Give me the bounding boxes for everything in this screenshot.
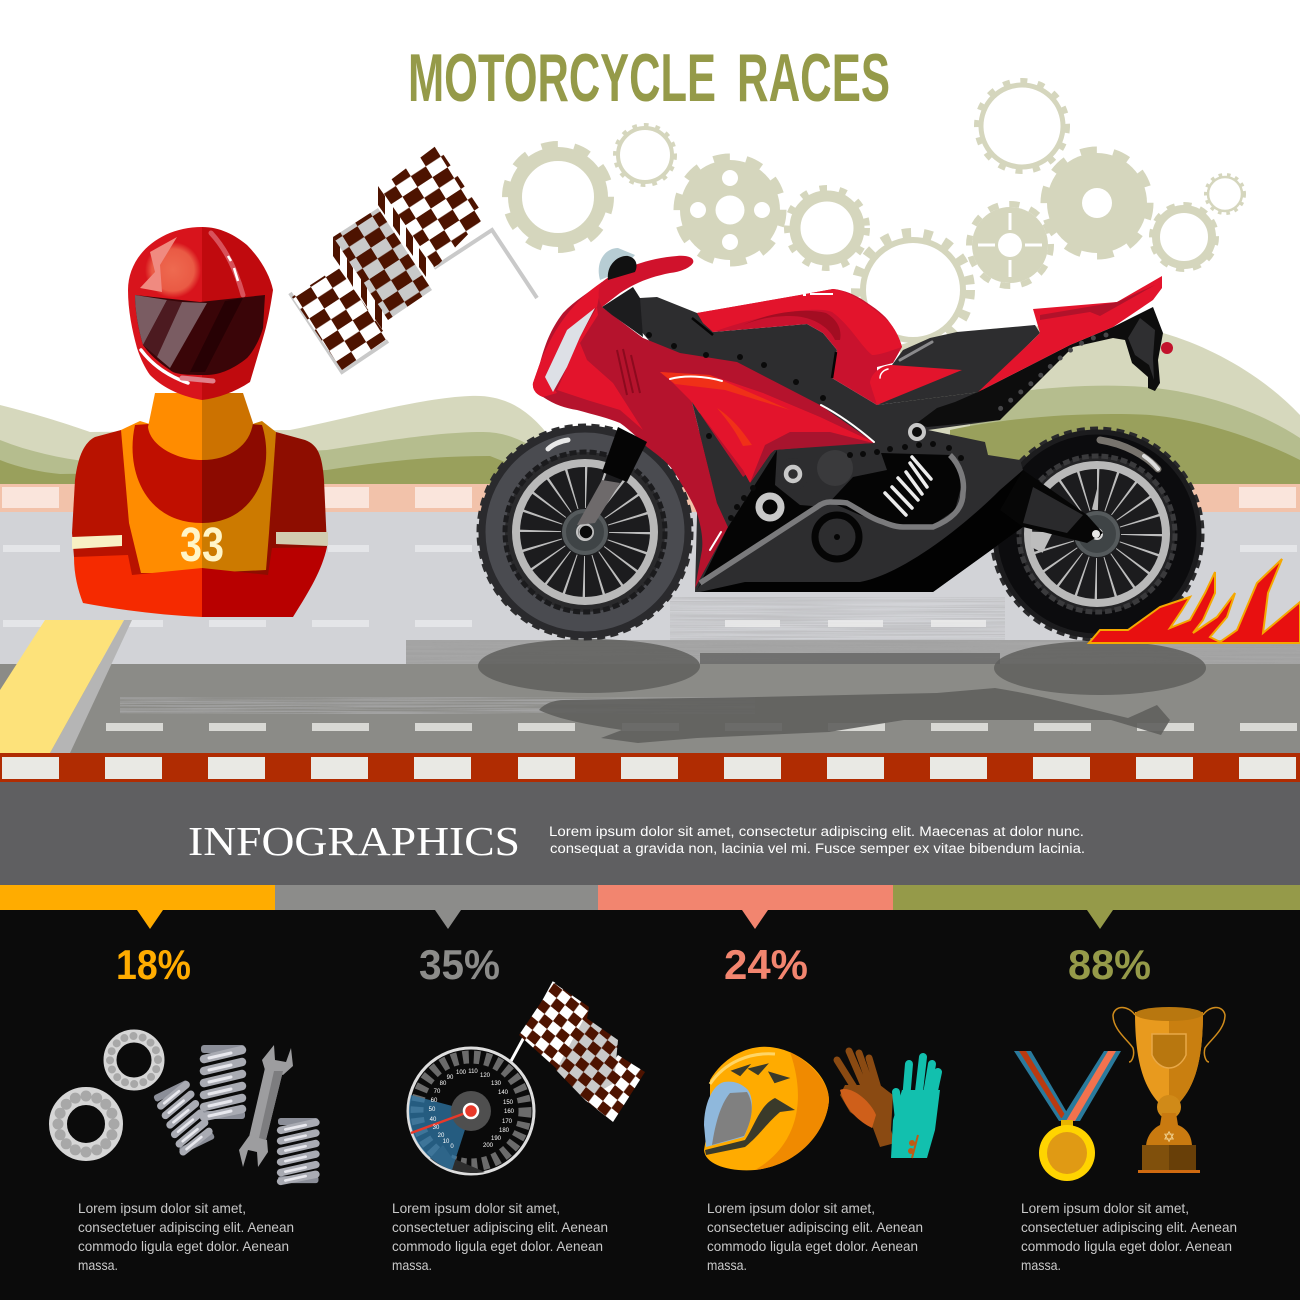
dial numbers: 0 xyxy=(450,1144,454,1150)
helmet shine xyxy=(145,242,201,298)
torso xyxy=(72,418,202,617)
title: MOTORCYCLE xyxy=(408,40,716,116)
body text: commodo ligula eget dolor. Aenean xyxy=(78,1238,289,1254)
background hills xyxy=(0,326,1300,484)
exhaust pipe xyxy=(700,455,963,583)
frame dark xyxy=(640,297,1023,592)
gear J xyxy=(977,81,1067,171)
lower fairing dark wedge xyxy=(692,402,753,527)
panel highlights xyxy=(660,372,790,410)
dial numbers: 20 xyxy=(438,1133,445,1139)
tail fairing xyxy=(978,276,1162,392)
helmet xyxy=(128,227,202,400)
rivets xyxy=(646,332,964,521)
flames xyxy=(1089,559,1300,643)
dark road surface xyxy=(0,664,1300,753)
body text xyxy=(392,1200,608,1273)
gear D xyxy=(787,188,867,268)
peach kerb strip xyxy=(0,484,1300,512)
icon: small flag xyxy=(504,982,645,1122)
gear G xyxy=(1044,150,1150,256)
vest xyxy=(121,421,202,573)
black panel xyxy=(0,910,1300,1300)
panel shade xyxy=(750,432,873,483)
headlight xyxy=(545,308,595,392)
belly black band xyxy=(700,470,1030,592)
column 2 xyxy=(275,885,645,1273)
neck xyxy=(148,393,202,460)
gear E xyxy=(856,233,970,347)
flag pole xyxy=(434,230,537,298)
screen inner dark xyxy=(602,287,643,337)
bike shadow on road xyxy=(478,639,1206,743)
colour bar xyxy=(275,885,598,929)
percent: 24% xyxy=(724,941,808,988)
body text: massa. xyxy=(392,1257,432,1273)
body text xyxy=(1021,1200,1237,1273)
body text: commodo ligula eget dolor. Aenean xyxy=(707,1238,918,1254)
front tyre highlight xyxy=(548,440,568,449)
dial numbers: 200 xyxy=(483,1143,494,1149)
tank xyxy=(697,289,902,405)
icon: trophy xyxy=(1113,1007,1225,1173)
fairing base xyxy=(533,282,875,588)
dial numbers: 60 xyxy=(431,1098,438,1104)
light road surface xyxy=(0,512,1300,664)
racer figure xyxy=(72,227,328,617)
dial numbers: 90 xyxy=(447,1075,454,1081)
visor xyxy=(135,295,265,375)
percent: 18% xyxy=(116,941,191,988)
body text xyxy=(78,1200,294,1273)
body text: Lorem ipsum dolor sit amet, xyxy=(1021,1200,1189,1216)
body text: consectetuer adipiscing elit. Aenean xyxy=(392,1219,608,1235)
icon: gloves xyxy=(837,1051,940,1158)
body text: Lorem ipsum dolor sit amet, xyxy=(707,1200,875,1216)
body text: consectetuer adipiscing elit. Aenean xyxy=(707,1219,923,1235)
skid streaks xyxy=(120,597,1300,714)
yellow track line xyxy=(50,620,132,753)
dial numbers: 110 xyxy=(468,1069,478,1075)
rear wheel xyxy=(993,430,1201,638)
gear A xyxy=(506,145,610,249)
engine black xyxy=(697,450,963,590)
dial numbers: 30 xyxy=(433,1125,440,1131)
dial numbers: 140 xyxy=(498,1090,509,1096)
colour bar xyxy=(893,885,1300,929)
icon: speedometer xyxy=(408,1048,534,1174)
dial numbers: 180 xyxy=(499,1128,510,1134)
bearings on bike xyxy=(759,425,924,518)
gear H xyxy=(1151,204,1217,270)
colour bar xyxy=(0,885,275,929)
dial numbers: 150 xyxy=(503,1100,514,1106)
dial numbers: 40 xyxy=(430,1117,437,1123)
arm bands xyxy=(72,535,122,549)
dial numbers xyxy=(429,1069,515,1150)
dial numbers: 100 xyxy=(456,1070,467,1076)
nose / screen arm xyxy=(599,256,693,307)
gear F xyxy=(969,204,1051,286)
icon: bearings xyxy=(58,1036,158,1152)
motorcycle xyxy=(480,248,1300,643)
body text: consectetuer adipiscing elit. Aenean xyxy=(78,1219,294,1235)
body text: commodo ligula eget dolor. Aenean xyxy=(392,1238,603,1254)
info band xyxy=(0,782,1300,885)
dial numbers: 120 xyxy=(480,1073,491,1079)
tail dots xyxy=(995,335,1106,413)
intro text: Lorem ipsum dolor sit amet, consectetur adipiscing elit. Maecenas at dolor nunc. xyxy=(549,824,1084,839)
body text: Lorem ipsum dolor sit amet, xyxy=(392,1200,560,1216)
dial numbers: 50 xyxy=(429,1107,436,1113)
tail subframe xyxy=(917,307,1163,427)
front fork xyxy=(577,427,647,539)
mirror xyxy=(599,248,637,280)
icon: yellow helmet xyxy=(704,1047,829,1170)
dial numbers: 170 xyxy=(502,1119,513,1125)
swingarm xyxy=(1000,470,1103,543)
folded arms xyxy=(74,555,202,617)
finish stripe xyxy=(0,753,1300,782)
percent: 88% xyxy=(1068,941,1151,988)
body text: commodo ligula eget dolor. Aenean xyxy=(1021,1238,1232,1254)
column 3 xyxy=(598,885,940,1273)
engine dark bar xyxy=(775,450,887,507)
race number: 33 xyxy=(180,519,224,572)
body text: massa. xyxy=(707,1257,747,1273)
body text: consectetuer adipiscing elit. Aenean xyxy=(1021,1219,1237,1235)
suspension spring xyxy=(885,457,931,515)
title: RACES xyxy=(737,40,890,116)
fairing bright xyxy=(557,307,643,430)
icon: springs xyxy=(153,1045,318,1183)
gear I xyxy=(1206,175,1244,213)
icon: medal xyxy=(1014,1051,1121,1181)
seat cowl red xyxy=(870,365,962,405)
column 1 xyxy=(0,885,318,1273)
dial numbers: 160 xyxy=(504,1109,515,1115)
dial numbers: 190 xyxy=(491,1136,502,1142)
body text: Lorem ipsum dolor sit amet, xyxy=(78,1200,246,1216)
road xyxy=(0,484,1300,753)
chest xyxy=(133,420,202,523)
percent: 35% xyxy=(419,941,500,988)
side panel bright xyxy=(660,372,873,483)
checkered flag xyxy=(290,145,537,372)
body text: massa. xyxy=(78,1257,118,1273)
column 4 xyxy=(893,885,1300,1273)
colour bar xyxy=(598,885,893,929)
lower lane dashes xyxy=(106,723,1297,731)
dial numbers: 130 xyxy=(491,1081,502,1087)
icon: wrench xyxy=(239,1045,293,1167)
icon: trophy: ✡ xyxy=(1163,1129,1175,1146)
intro text: consequat a gravida non, lacinia vel mi. Fusce semper ex vitae bibendum lacinia. xyxy=(550,841,1085,856)
vent slots xyxy=(617,349,640,395)
visor glint xyxy=(141,350,213,383)
gear C xyxy=(677,157,783,263)
dial numbers: 80 xyxy=(440,1081,447,1087)
dial numbers: 70 xyxy=(434,1089,441,1095)
tank black line xyxy=(692,318,836,378)
engine circles xyxy=(815,450,859,559)
front wheel xyxy=(480,427,690,637)
dial numbers: 10 xyxy=(443,1139,450,1145)
body text xyxy=(707,1200,923,1273)
intro text xyxy=(549,824,1085,856)
gears cluster xyxy=(506,81,1244,347)
gear B xyxy=(615,125,675,185)
body text: massa. xyxy=(1021,1257,1061,1273)
infographics heading: INFOGRAPHICS xyxy=(188,818,520,864)
seat xyxy=(877,325,1040,405)
